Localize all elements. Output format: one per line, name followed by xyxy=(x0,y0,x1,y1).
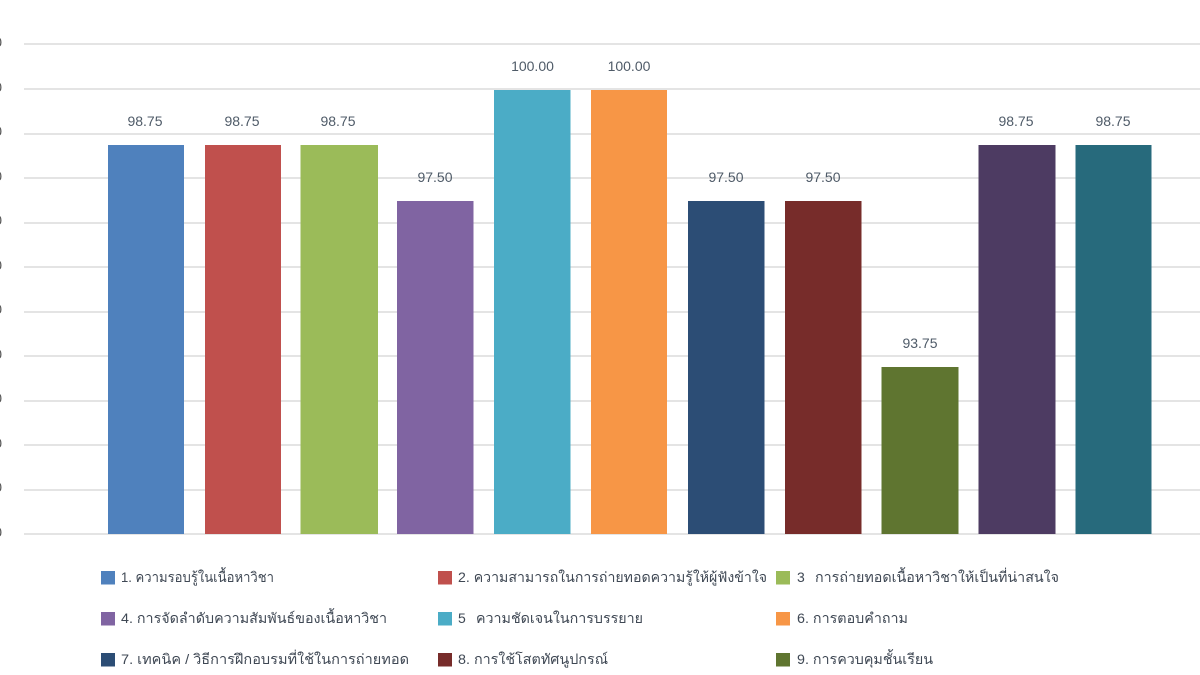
legend item 4: 4. การจัดลำดับความสัมพันธ์ของเนื้อหาวิชา xyxy=(121,608,387,626)
legend item 3: 3 xyxy=(797,569,805,585)
legend item 5: ความชัดเจนในการบรรยาย xyxy=(476,610,643,626)
value labels: 97.50 xyxy=(417,169,453,185)
legend item 2: 2. ความสามารถในการถ่ายทอดความรู้ให้ผู้ฟังข้าใจ xyxy=(458,569,767,586)
bar 5: 100.00 xyxy=(494,90,570,534)
bar 8: 97.50 xyxy=(785,201,862,534)
y-axis labels (cropped at left edge) xyxy=(0,34,2,540)
value labels: 98.75 xyxy=(1095,113,1131,129)
value labels xyxy=(127,58,1131,351)
bar 4: 97.50 xyxy=(397,201,474,534)
bars xyxy=(108,90,1152,534)
value labels: 97.50 xyxy=(708,169,744,185)
bar 9: 93.75 xyxy=(882,367,958,534)
bar 3: 98.75 xyxy=(300,145,378,534)
bar 10: 98.75 xyxy=(978,145,1056,534)
bar 11: 98.75 xyxy=(1076,145,1152,534)
legend item 5: 5 xyxy=(458,610,466,626)
value labels: 100.00 xyxy=(511,58,554,74)
legend item 9: 9. การควบคุมชั้นเรียน xyxy=(797,649,933,668)
value labels: 98.75 xyxy=(998,113,1034,129)
legend item 7: 7. เทคนิค / วิธีการฝึกอบรมที่ใช้ในการถ่ายทอด xyxy=(121,650,409,667)
bar 1: 98.75 xyxy=(108,145,184,534)
legend item 1: 1. ความรอบรู้ในเนื้อหาวิชา xyxy=(121,567,274,586)
value labels: 98.75 xyxy=(320,113,356,129)
bar 6: 100.00 xyxy=(591,90,667,534)
bar 7: 97.50 xyxy=(688,201,764,534)
legend xyxy=(101,567,1059,668)
value labels: 100.00 xyxy=(608,58,651,74)
bar 2: 98.75 xyxy=(205,145,281,534)
value labels: 98.75 xyxy=(224,113,260,129)
legend item 3: การถ่ายทอดเนื้อหาวิชาให้เป็นที่น่าสนใจ xyxy=(815,567,1059,585)
value labels: 98.75 xyxy=(127,113,163,129)
value labels: 93.75 xyxy=(902,335,938,351)
legend item 8: 8. การใช้โสตทัศนูปกรณ์ xyxy=(458,651,608,668)
legend item 6: 6. การตอบคำถาม xyxy=(797,610,908,626)
value labels: 97.50 xyxy=(805,169,841,185)
